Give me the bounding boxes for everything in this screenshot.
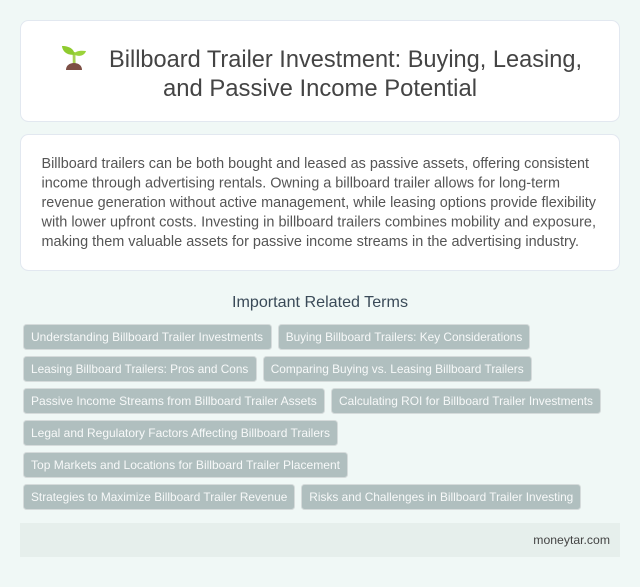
chip: Leasing Billboard Trailers: Pros and Cons: [31, 362, 248, 376]
chip: [24, 324, 272, 350]
text block: description: income through advertising rentals. Owning a billboard trailer allows for long-term: [42, 174, 560, 192]
chip: [332, 388, 600, 414]
footer: [20, 523, 620, 557]
heading: related terms: Important Related Terms: [232, 294, 408, 311]
title: and Passive Income Potential: [163, 75, 477, 102]
chip: [24, 420, 338, 446]
chip: Passive Income Streams from Billboard Trailer Assets: [31, 394, 317, 408]
text block: description: with lower upfront costs. Investing in billboard trailers combines mobility and exposure,: [41, 214, 596, 230]
chip: [24, 356, 256, 382]
chip: Strategies to Maximize Billboard Trailer Revenue: [31, 490, 288, 504]
text block: description: [41, 155, 596, 250]
title: [109, 46, 582, 102]
panel: description: [20, 134, 620, 270]
footer: moneytar.com: [533, 533, 610, 547]
icon: seedling: [62, 46, 86, 70]
title: Billboard Trailer Investment: Buying, Leasing,: [109, 46, 582, 73]
chip: Top Markets and Locations for Billboard Trailer Placement: [31, 458, 341, 472]
chip: Calculating ROI for Billboard Trailer Investments: [339, 394, 593, 408]
text block: description: making them valuable assets for passive income streams in the advertising industry.: [42, 233, 579, 250]
chip: Risks and Challenges in Billboard Trailer Investing: [309, 490, 573, 504]
chip: Comparing Buying vs. Leasing Billboard Trailers: [271, 362, 524, 376]
chip: [24, 484, 294, 510]
text block: description: Billboard trailers can be both bought and leased as passive assets, offering consistent: [42, 155, 590, 172]
chip: Buying Billboard Trailers: Key Considerations: [286, 330, 522, 344]
chip: [24, 452, 348, 478]
chip: [278, 324, 530, 350]
text block: description: revenue generation without active management, while leasing options provide flexibility: [42, 194, 596, 211]
chip: Understanding Billboard Trailer Investments: [31, 330, 263, 344]
panel: header: [20, 20, 620, 122]
chip: [24, 388, 324, 414]
chip: [264, 356, 532, 382]
chip: [302, 484, 580, 510]
chip: Legal and Regulatory Factors Affecting Billboard Trailers: [31, 426, 330, 440]
panel: term chips: [24, 324, 600, 510]
